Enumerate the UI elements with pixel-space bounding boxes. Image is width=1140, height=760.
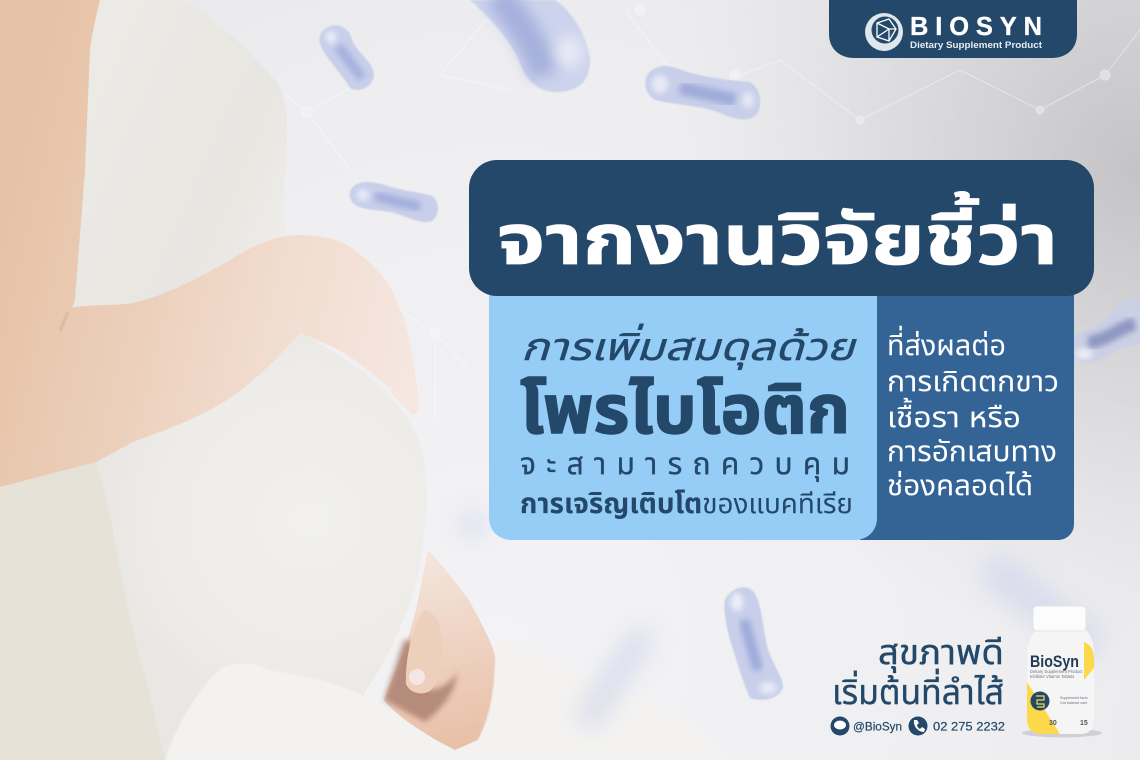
bottle label text: Gut balance care (1060, 701, 1087, 705)
logo globe icon (865, 13, 903, 51)
blurred capsules (459, 512, 1085, 715)
contact row (830, 716, 1005, 736)
line handle: @BioSyn (853, 720, 902, 734)
title banner (469, 160, 1094, 296)
nail (409, 669, 425, 685)
bottle label text (1030, 669, 1088, 705)
woman figure (0, 0, 730, 760)
capsule: left middle (350, 182, 438, 222)
right panel text: การอักเสบทาง (887, 436, 1057, 468)
icon: phone (908, 716, 928, 736)
right panel text (887, 325, 1059, 502)
right panel text: ช่องคลอดได้ (887, 470, 1033, 502)
text: can control: จะสามารถควบคุม (520, 448, 850, 482)
lower hand (384, 550, 498, 750)
finger (406, 610, 442, 693)
lap fabric (165, 641, 730, 760)
text: adding balance: การเพิ่มสมดุลด้วย (521, 323, 857, 370)
text: growth of bacteria: การเจริญเติบโตของแบคทีเรีย (520, 488, 853, 519)
upper dress (70, 0, 320, 345)
left dress panel (0, 462, 165, 760)
phone number: 02 275 2232 (933, 720, 1005, 734)
right panel text: เชื้อรา หรือ (887, 397, 1021, 434)
bottle shadow (1022, 728, 1102, 738)
capsule: upper middle (645, 66, 760, 119)
capsule: bottom (724, 587, 783, 700)
title text: จากงานวิจัยชี้ว่า (497, 191, 1058, 279)
right panel text: ที่ส่งผลต่อ (887, 325, 1006, 362)
right panel text: การเกิดตกขาว (887, 366, 1059, 398)
bottle label text: Supplement facts (1060, 696, 1088, 700)
yellow label corner (1027, 682, 1060, 734)
brand tagline: Dietary Supplement Product (910, 40, 1043, 51)
bottle count: 30 (1049, 720, 1057, 727)
bottle cap (1033, 606, 1086, 631)
yellow label side (1084, 642, 1094, 680)
text: probiotic: โพรไบโอติก (520, 372, 850, 448)
bottle size: 15 (1080, 720, 1088, 727)
brand name: BIOSYN (910, 13, 1042, 41)
capsule: right edge (1074, 298, 1140, 363)
bottle body (1027, 630, 1094, 734)
slogan: เริ่มต้นที่ลำไส้ (832, 668, 1004, 712)
bottle brand: BioSyn (1030, 653, 1079, 671)
product bottle (1022, 606, 1102, 738)
bottle label text: Dietary Supplement Product (1030, 669, 1083, 674)
belly (60, 333, 426, 760)
elbow crease (60, 312, 68, 331)
brand badge (829, 0, 1077, 58)
slogan (832, 633, 1004, 712)
bottle label text: Inhibitor Vitamin Tablets (1030, 674, 1074, 679)
left light blue panel (489, 280, 877, 540)
bottle badge (1030, 692, 1050, 710)
palm shadow (384, 640, 458, 722)
slogan: สุขภาพดี (878, 633, 1004, 673)
icon: line (830, 716, 850, 736)
capsule: top large (470, 0, 590, 92)
upper arm and forearm (0, 0, 419, 487)
capsule: upper left (319, 25, 374, 90)
molecular network pattern (285, 5, 1140, 420)
right dark blue panel (860, 280, 1074, 540)
